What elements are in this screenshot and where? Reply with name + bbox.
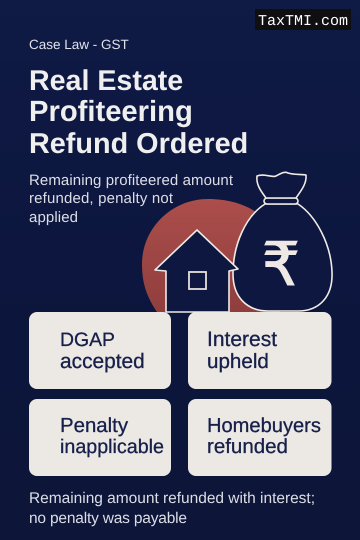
icon: rupee sign: ₹: [262, 230, 300, 300]
summary text: Remaining amount refunded with interest;: [29, 490, 315, 507]
card: Interest upheld: [188, 312, 332, 389]
card: Homebuyers refunded: [188, 399, 332, 476]
card: Penalty inapplicable: inapplicable: [60, 436, 164, 458]
title: Refund Ordered: [29, 128, 248, 160]
card: Interest upheld: upheld: [207, 350, 269, 373]
title: Profiteering: [29, 96, 193, 128]
category label: Case Law - GST: [29, 37, 129, 52]
icon: house: [155, 230, 238, 312]
title: Real Estate: [29, 65, 183, 97]
card: DGAP accepted: accepted: [60, 350, 145, 373]
card: Homebuyers refunded: refunded: [207, 435, 288, 458]
red circle backdrop: [142, 199, 280, 312]
card: Interest upheld: Interest: [207, 328, 277, 351]
subtitle: refunded, penalty not: [29, 190, 174, 207]
card: DGAP accepted: [29, 312, 171, 389]
title: [29, 65, 248, 160]
summary text: no penalty was payable: [29, 510, 187, 527]
subtitle: applied: [29, 209, 78, 226]
icon: money bag: [233, 172, 332, 311]
card: Penalty inapplicable: Penalty: [60, 415, 129, 437]
card: DGAP accepted: DGAP: [60, 329, 115, 351]
card: Penalty inapplicable: [29, 399, 171, 476]
card: Homebuyers refunded: Homebuyers: [207, 415, 321, 437]
subtitle: [29, 172, 234, 226]
summary text: [29, 490, 315, 527]
logo: TaxTMI.com: TaxTMI.com: [258, 13, 348, 30]
subtitle: Remaining profiteered amount: [29, 172, 234, 189]
illustration: house and money bag: [142, 172, 332, 312]
